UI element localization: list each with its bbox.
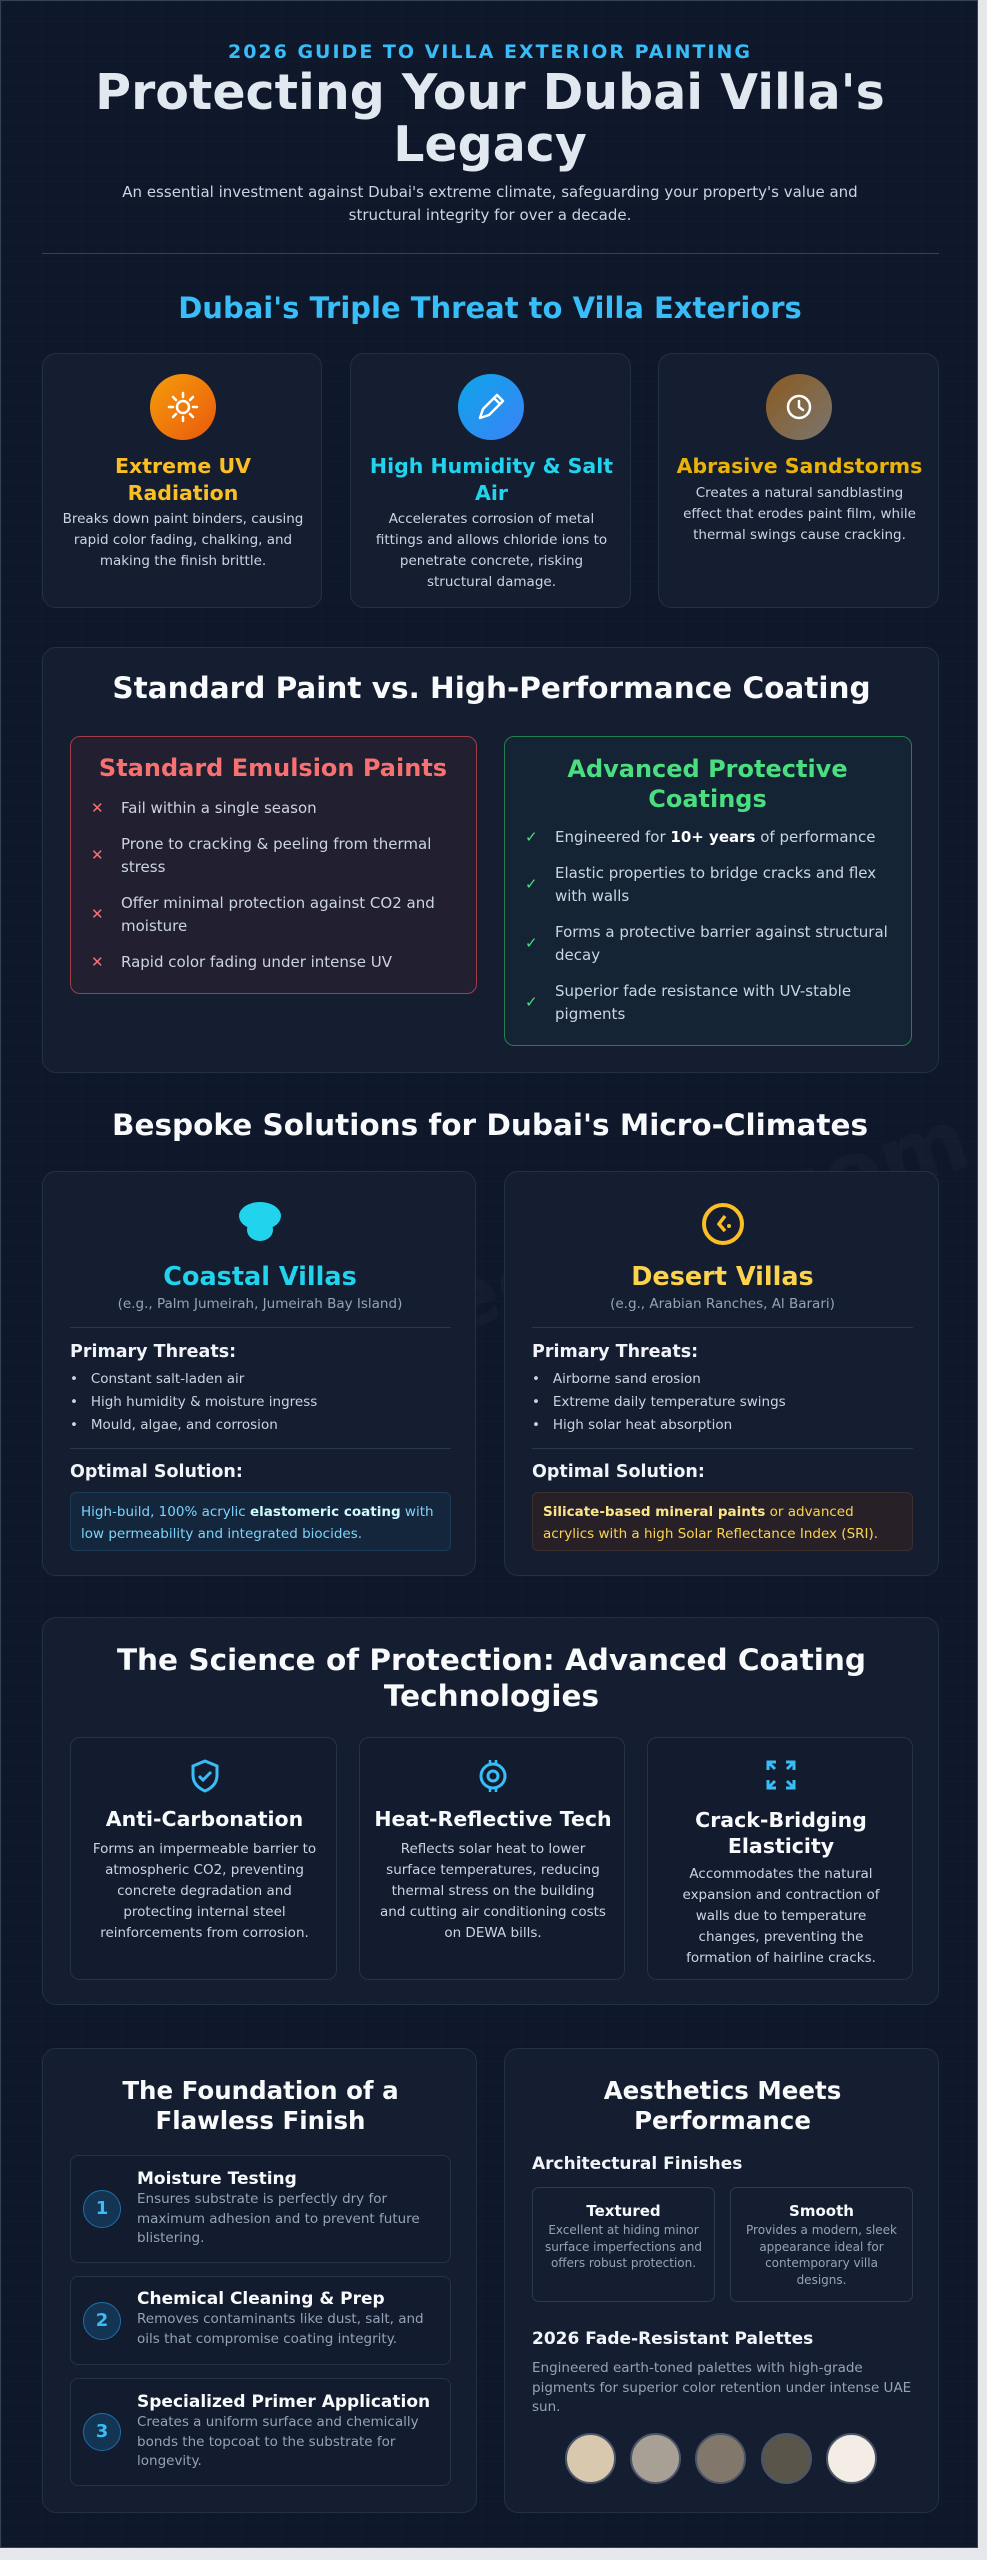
step 3: Specialized Primer Application xyxy=(137,2392,430,2412)
panel: sandstorms xyxy=(658,353,939,608)
card: crack bridging: Crack-Bridging xyxy=(695,1808,867,1832)
finish: smooth: Provides a modern, sleek appearance ideal for contemporary villa designs. xyxy=(746,2223,897,2286)
color swatches xyxy=(565,2433,877,2484)
step 3: Creates a uniform surface and chemically bonds the topcoat to the substrate for longevity. xyxy=(137,2414,419,2469)
heading: Performance xyxy=(634,2106,811,2135)
threats: • Extreme daily temperature swings xyxy=(532,1394,786,1410)
card: crack bridging: Accommodates the natural expansion and contraction of walls due to temperature changes, preventing the formation of hairline cracks. xyxy=(682,1866,879,1966)
card: heat reflective: Reflects solar heat to lower surface temperatures, reducing thermal stress on the building and cutting air conditioning costs on DEWA bills. xyxy=(380,1841,606,1941)
box: standard paints: ✕ xyxy=(91,953,104,971)
box: advanced coatings: ✓ xyxy=(525,993,538,1011)
heading: Technologies xyxy=(384,1679,599,1713)
subheading: palettes: 2026 Fade-Resistant Palettes xyxy=(532,2329,813,2349)
box: advanced coatings: Coatings xyxy=(648,785,767,813)
icon: compass xyxy=(702,1203,744,1245)
card title: Extreme UV xyxy=(115,454,251,478)
panel: humidity xyxy=(350,353,631,608)
title: Legacy xyxy=(393,116,587,173)
title: Desert Villas xyxy=(631,1262,814,1292)
title: Protecting Your Dubai Villa's xyxy=(95,64,885,121)
threats: Primary Threats: xyxy=(70,1342,236,1362)
box: advanced coatings: Forms a protective barrier against structural decay xyxy=(555,923,888,964)
box: standard paints: Fail within a single season xyxy=(121,799,317,817)
panel: aesthetics: Engineered earth-toned palettes with high-grade pigments for superior color retention under intense UAE sun. xyxy=(532,2360,911,2415)
list: drawbacks xyxy=(91,799,435,971)
card title: Radiation xyxy=(128,481,238,505)
card: heat reflective xyxy=(359,1737,625,1980)
heading: Aesthetics Meets xyxy=(604,2076,841,2105)
box: standard paints: Offer minimal protection against CO2 and moisture xyxy=(121,894,435,935)
finish: smooth xyxy=(730,2187,913,2302)
box: standard paints: ✕ xyxy=(91,799,104,817)
panel: foundation xyxy=(42,2048,477,2513)
panel: coastal villas xyxy=(42,1171,476,1576)
card: anti-carbonation: Anti-Carbonation xyxy=(106,1807,303,1831)
panel: desert villas xyxy=(504,1171,939,1576)
heading: bespoke solutions: Bespoke Solutions for Dubai's Micro-Climates xyxy=(112,1108,868,1142)
step 2: Chemical Cleaning & Prep xyxy=(137,2289,385,2309)
threats: • Airborne sand erosion xyxy=(532,1371,701,1387)
icon: drop xyxy=(239,1202,281,1241)
panel: coastal villas: High-build, 100% acrylic elastomeric coating with low permeability and integrated biocides. xyxy=(81,1504,434,1542)
box: advanced coatings: ✓ xyxy=(525,828,538,846)
threats: • High humidity & moisture ingress xyxy=(70,1394,317,1410)
card: crack bridging xyxy=(647,1737,913,1980)
card text: Breaks down paint binders, causing rapid color fading, chalking, and making the finish brittle. xyxy=(63,511,303,569)
box: standard paints: Prone to cracking & peeling from thermal stress xyxy=(121,835,431,876)
threats: • Constant salt-laden air xyxy=(70,1371,244,1387)
box: advanced coatings: Superior fade resistance with UV-stable pigments xyxy=(555,982,851,1023)
box: standard paints xyxy=(70,736,477,994)
step 2: Removes contaminants like dust, salt, and oils that compromise coating integrity. xyxy=(137,2311,424,2346)
title xyxy=(95,64,885,173)
panel: desert villas: Silicate-based mineral paints or advanced acrylics with a high Solar Reflectance Index (SRI). xyxy=(543,1504,878,1542)
subheading: finishes: Architectural Finishes xyxy=(532,2154,742,2174)
card title: Abrasive Sandstorms xyxy=(677,454,922,478)
watermark: novotechme.com xyxy=(163,1089,978,1440)
panel: coastal villas: (e.g., Palm Jumeirah, Jumeirah Bay Island) xyxy=(118,1296,402,1312)
box: advanced coatings: Engineered for 10+ years of performance xyxy=(555,828,876,846)
panel: UV xyxy=(42,353,322,608)
heading: The Science of Protection: Advanced Coating xyxy=(117,1643,866,1677)
solution: Optimal Solution: xyxy=(70,1462,243,1482)
heading: Flawless Finish xyxy=(155,2106,366,2135)
card title: Air xyxy=(475,481,508,505)
title: Coastal Villas xyxy=(163,1262,357,1292)
threats xyxy=(70,1342,317,1433)
panel: science xyxy=(42,1617,939,2005)
list: benefits xyxy=(525,828,888,1023)
card: anti-carbonation xyxy=(70,1737,337,1980)
box: advanced coatings: Elastic properties to bridge cracks and flex with walls xyxy=(555,864,876,905)
step 3 xyxy=(70,2378,451,2486)
step 2 xyxy=(70,2276,451,2365)
step 3: 3 xyxy=(96,2421,108,2442)
step 1: Ensures substrate is perfectly dry for maximum adhesion and to prevent future blistering. xyxy=(137,2191,420,2246)
card title: High Humidity & Salt xyxy=(370,454,613,478)
panel: desert villas: (e.g., Arabian Ranches, Al Barari) xyxy=(610,1296,835,1312)
threats: Primary Threats: xyxy=(532,1342,698,1362)
box: advanced coatings: Advanced Protective xyxy=(567,755,848,783)
eyebrow label: 2026 GUIDE TO VILLA EXTERIOR PAINTING xyxy=(228,41,752,63)
heading xyxy=(604,2076,841,2135)
heading: The Foundation of a xyxy=(122,2076,399,2105)
finish: textured: Excellent at hiding minor surface imperfections and offers robust protection. xyxy=(545,2223,702,2270)
finish: smooth: Smooth xyxy=(789,2202,854,2220)
card: heat reflective: Heat-Reflective Tech xyxy=(374,1807,612,1831)
card text: Creates a natural sandblasting effect that erodes paint film, while thermal swings cause cracking. xyxy=(683,485,916,543)
intro text: An essential investment against Dubai's extreme climate, safeguarding your property's value and structural integrity for over a decade. xyxy=(122,183,858,224)
box: advanced coatings: ✓ xyxy=(525,875,538,893)
heading: Standard Paint vs. High-Performance Coating xyxy=(112,671,871,705)
card text: Accelerates corrosion of metal fittings and allows chloride ions to penetrate concrete, risking structural damage. xyxy=(376,511,607,590)
box: standard paints: Standard Emulsion Paints xyxy=(99,754,447,782)
step 1 xyxy=(70,2155,451,2263)
card title xyxy=(370,454,613,505)
card title xyxy=(115,454,251,505)
box: advanced coatings: ✓ xyxy=(525,934,538,952)
threats: • Mould, algae, and corrosion xyxy=(70,1417,278,1433)
step 1: 1 xyxy=(96,2198,108,2219)
threats: • High solar heat absorption xyxy=(532,1417,732,1433)
icon: sun xyxy=(150,374,216,440)
panel: aesthetics xyxy=(504,2048,939,2513)
heading xyxy=(117,1643,866,1713)
box: standard paints: ✕ xyxy=(91,905,104,923)
card: anti-carbonation: Forms an impermeable barrier to atmospheric CO2, preventing concrete degradation and protecting internal steel reinforcements from corrosion. xyxy=(93,1841,316,1941)
heading: triple threat: Dubai's Triple Threat to Villa Exteriors xyxy=(178,291,802,325)
icon: pencil xyxy=(458,374,524,440)
finish: textured: Textured xyxy=(586,2202,661,2220)
box: advanced coatings xyxy=(504,736,912,1046)
heading xyxy=(122,2076,399,2135)
step 1: Moisture Testing xyxy=(137,2169,297,2189)
icon: clock xyxy=(766,374,832,440)
card: crack bridging: Elasticity xyxy=(728,1834,834,1858)
step 2: 2 xyxy=(96,2310,108,2331)
solution: Optimal Solution: xyxy=(532,1462,705,1482)
threats xyxy=(532,1342,786,1433)
box: standard paints: Rapid color fading under intense UV xyxy=(121,953,392,971)
finish: textured xyxy=(532,2187,715,2302)
panel: comparison xyxy=(42,647,939,1073)
box: standard paints: ✕ xyxy=(91,846,104,864)
